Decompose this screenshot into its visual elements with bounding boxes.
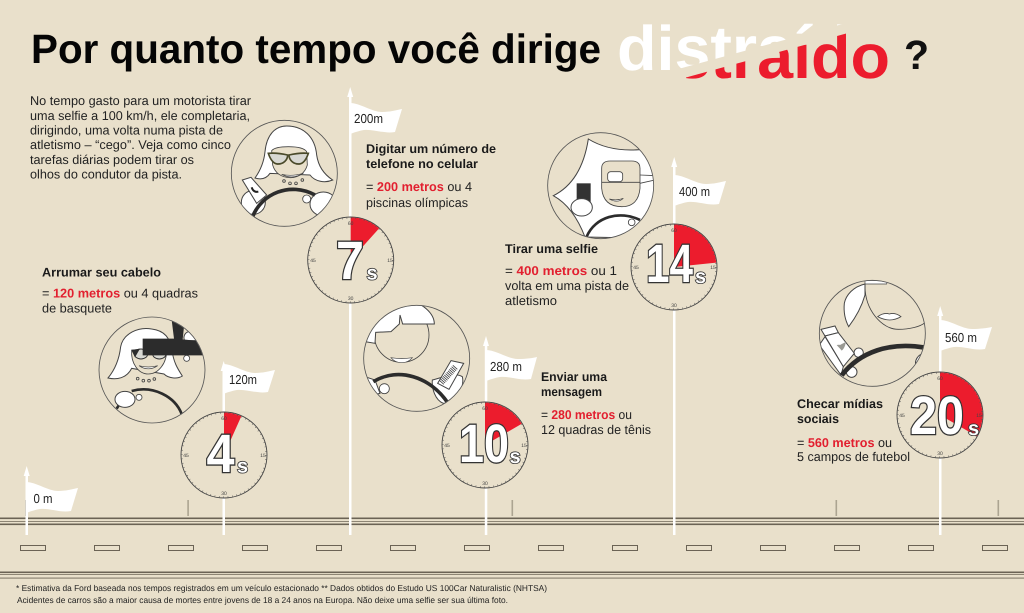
panel: digitar um numero: piscinas olímpicas (366, 196, 468, 210)
clock: 20 s: s (968, 418, 979, 440)
panel: checar midias sociais: Checar mídias (797, 397, 883, 411)
icon: driver checking social media (819, 280, 925, 386)
clock: 14 s: 45 (633, 265, 639, 271)
panel: checar midias sociais: = 560 metros ou (797, 436, 892, 450)
clock: 7 s: s (366, 262, 378, 284)
panel: tirar uma selfie: = 400 metros ou 1 (505, 264, 617, 278)
clock: 7 s: 45 (310, 258, 316, 264)
clock: 4 s: 45 (183, 453, 189, 459)
intro text: dirigindo, uma volta numa pista de (30, 124, 223, 138)
clock: 4 s: 15 (260, 453, 266, 459)
clock: 14 s: 30 (671, 303, 677, 309)
panel: tirar uma selfie: atletismo (505, 294, 557, 308)
panel: checar midias sociais (797, 397, 910, 464)
clock: 20 s: 45 (899, 413, 905, 419)
panel: arrumar seu cabelo (42, 266, 198, 316)
flag: 400 m (671, 157, 726, 535)
clock: 4 s: 30 (221, 491, 227, 497)
flag: 280 m: 280 m (490, 359, 522, 374)
flag: 200m (347, 87, 402, 535)
clock: 14 s (631, 224, 717, 310)
panel: enviar uma mensagem (541, 370, 651, 437)
title: distraído (617, 22, 890, 92)
clock: 4 s: 4 (206, 424, 234, 484)
flag: 400 m: 400 m (679, 184, 710, 199)
clock: 7 s: 7 (336, 231, 364, 291)
clock: 20 s: 15 (976, 413, 982, 419)
flag: 200m: 200m (354, 111, 383, 126)
clock: 7 s (308, 217, 394, 303)
icon: driver texting (364, 302, 470, 411)
clock: 14 s: 60 (671, 228, 677, 234)
panel: digitar um numero: = 200 metros ou 4 (366, 180, 472, 194)
clock: 7 s: 30 (348, 296, 354, 302)
clock: 4 s: s (237, 456, 248, 478)
clock: 10 s (442, 402, 528, 488)
panel: enviar uma mensagem: = 280 metros ou (541, 408, 632, 422)
panel: tirar uma selfie: volta em uma pista de (505, 279, 629, 293)
title: distraído (617, 14, 890, 84)
clock: 7 s: 60 (348, 221, 354, 227)
clock: 20 s (897, 372, 983, 458)
road (0, 500, 1024, 579)
clock: 10 s: 45 (444, 443, 450, 449)
clock: 4 s (181, 412, 267, 498)
flag: 280 m (483, 336, 537, 535)
intro text: No tempo gasto para um motorista tirar (30, 94, 252, 108)
panel: arrumar seu cabelo: de basquete (42, 302, 112, 316)
clock: 4 s: 60 (221, 416, 227, 422)
flag: 120m: 120m (229, 372, 257, 387)
clock: 20 s: 60 (937, 376, 943, 382)
intro text (30, 94, 252, 182)
intro text: uma selfie a 100 km/h, ele completaria, (30, 109, 250, 123)
flag: 120m (221, 361, 275, 535)
panel: checar midias sociais: sociais (797, 412, 839, 426)
flag: 0 m (24, 466, 78, 535)
intro text: atletismo – “cego”. Veja como cinco (30, 138, 231, 152)
title: Por quanto tempo você dirige (31, 26, 601, 72)
panel: enviar uma mensagem: mensagem (541, 385, 602, 399)
clock: 20 s: 20 (910, 386, 964, 446)
panel: enviar uma mensagem: Enviar uma (541, 370, 608, 384)
panel: tirar uma selfie (505, 242, 629, 308)
clock: 14 s: 14 (646, 234, 693, 294)
footnotes: * Estimativa da Ford baseada nos tempos registrados em um veículo estacionado ** Dados obtidos do Estudo US 100Car Naturalistic (NHTSA) (16, 583, 547, 593)
clock: 20 s: 30 (937, 451, 943, 457)
icon: driver fixing hair in mirror (99, 317, 205, 423)
clock: 10 s: 30 (482, 481, 488, 487)
intro text: tarefas diárias podem tirar os (30, 153, 194, 167)
flag: 560 m (937, 306, 992, 535)
intro text: olhos do condutor da pista. (30, 168, 182, 182)
clock: 10 s: 10 (459, 414, 509, 474)
icon: driver taking a selfie (548, 133, 655, 239)
footnotes (16, 583, 547, 605)
panel: checar midias sociais: 5 campos de futebol (797, 450, 910, 464)
clock: 7 s: 15 (387, 258, 393, 264)
clock: 10 s: 15 (521, 443, 527, 449)
clock: 10 s: s (510, 446, 521, 468)
panel: digitar um numero: Digitar um número de (366, 142, 496, 156)
panel: tirar uma selfie: Tirar uma selfie (505, 242, 598, 256)
clock: 14 s: 15 (710, 265, 716, 271)
title (34, 24, 927, 79)
title: ? (904, 32, 929, 78)
panel: enviar uma mensagem: 12 quadras de tênis (541, 423, 651, 437)
footnotes: Acidentes de carros são a maior causa de mortes entre jovens de 18 a 24 anos na Europa. Não deixe uma selfie ser sua última foto. (17, 595, 508, 605)
panel: digitar um numero: telefone no celular (366, 157, 478, 171)
panel: digitar um numero (366, 142, 496, 210)
panel: arrumar seu cabelo: Arrumar seu cabelo (42, 266, 161, 280)
flag: 0 m: 0 m (34, 491, 52, 506)
flag: 560 m: 560 m (945, 330, 977, 345)
panel: arrumar seu cabelo: = 120 metros ou 4 quadras (42, 286, 198, 300)
clock: 14 s: s (695, 266, 706, 288)
icon: driver using phone (231, 120, 337, 226)
clock: 10 s: 60 (482, 406, 488, 412)
